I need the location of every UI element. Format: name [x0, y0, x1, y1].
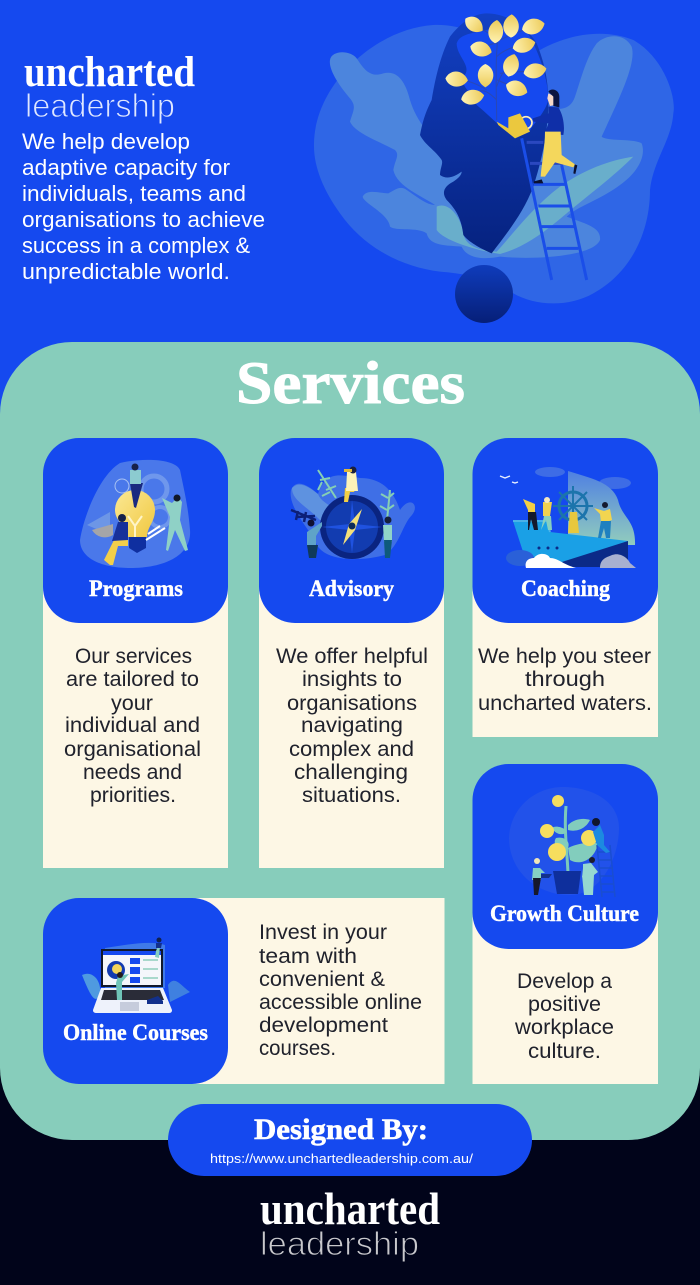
growth header [472, 764, 658, 949]
watering can [497, 113, 532, 138]
hero illustration [314, 13, 674, 323]
green leaf tint [437, 157, 633, 254]
logo: top [24, 49, 195, 124]
online header [43, 898, 228, 1084]
services heading: Services [236, 350, 465, 416]
advisory text: situations. [302, 784, 401, 807]
person on ladder [533, 90, 577, 183]
background blob [314, 25, 674, 303]
coaching header [472, 438, 658, 623]
footer background [0, 1000, 700, 1285]
online text: accessible online [259, 991, 422, 1014]
coaching text: We help you steer [478, 645, 651, 668]
programs text: individual and [65, 714, 200, 737]
card: coaching [472, 438, 658, 737]
intro text: organisations to achieve [22, 207, 265, 232]
advisory description panel [259, 560, 444, 868]
growth text: workplace [514, 1016, 614, 1039]
programs text: are tailored to [66, 668, 199, 691]
leaves [445, 13, 548, 106]
plant stems [457, 25, 535, 120]
growth text [514, 970, 614, 1063]
online text: team with [259, 945, 357, 968]
advisory header [259, 438, 444, 623]
coaching title: Coaching [521, 576, 610, 601]
designed by pill [168, 1104, 532, 1176]
programs title: Programs [89, 576, 183, 601]
coaching text: uncharted waters. [478, 692, 652, 715]
programs text: Our services [75, 645, 192, 668]
advisory text: navigating [301, 714, 403, 737]
head silhouette [420, 13, 548, 253]
programs text: needs and [83, 761, 182, 784]
coaching text: through [525, 668, 605, 691]
card: growth culture [472, 764, 658, 1084]
programs text [64, 645, 201, 807]
growth title: Growth Culture [490, 901, 639, 926]
online text: courses. [259, 1037, 336, 1060]
programs text: your [111, 692, 153, 715]
card: online courses [43, 898, 444, 1084]
online description panel [190, 898, 444, 1084]
intro text: adaptive capacity for [22, 155, 230, 180]
intro text: We help develop [22, 129, 190, 154]
card: advisory [259, 438, 444, 868]
coaching text [478, 645, 652, 715]
website url: https://www.unchartedleadership.com.au/ [210, 1151, 473, 1166]
logo: footer: leadership [260, 1225, 419, 1262]
intro text [22, 129, 265, 284]
services panel [0, 342, 700, 1140]
pale foliage [330, 36, 643, 258]
online text: convenient & [259, 968, 385, 991]
logo: top: leadership [25, 87, 175, 124]
designed by heading: Designed By: [254, 1113, 428, 1146]
advisory text [276, 645, 428, 807]
growth text: culture. [528, 1040, 601, 1063]
icon: compass team [291, 466, 415, 559]
icon: light bulb team [80, 460, 190, 568]
online text: Invest in your [259, 921, 387, 944]
advisory text: organisations [287, 692, 417, 715]
programs text: priorities. [90, 784, 176, 807]
online text [259, 921, 422, 1060]
logo: footer: uncharted [260, 1184, 440, 1234]
growth text: positive [528, 993, 601, 1016]
logo: top: uncharted [24, 49, 195, 96]
intro text: individuals, teams and [22, 181, 246, 206]
advisory text: We offer helpful [276, 645, 428, 668]
icon: ship team [500, 467, 636, 568]
online title: Online Courses [63, 1020, 208, 1045]
growth text: Develop a [517, 970, 612, 993]
card: programs [43, 438, 228, 868]
ladder [522, 138, 587, 280]
head cutout [457, 22, 548, 132]
logo: footer [260, 1184, 440, 1262]
advisory title: Advisory [309, 576, 394, 601]
ball [455, 265, 513, 323]
online text: development [259, 1014, 388, 1037]
programs header [43, 438, 228, 623]
programs text: organisational [64, 738, 201, 761]
programs description panel [43, 560, 228, 868]
intro text: success in a complex & [22, 233, 250, 258]
advisory text: complex and [289, 738, 414, 761]
intro text: unpredictable world. [22, 259, 230, 284]
icon: bulb plant [509, 787, 619, 897]
advisory text: challenging [294, 761, 408, 784]
icon: laptop [82, 938, 190, 1013]
coaching description panel [472, 560, 658, 737]
growth description panel [472, 880, 658, 1084]
advisory text: insights to [302, 668, 402, 691]
